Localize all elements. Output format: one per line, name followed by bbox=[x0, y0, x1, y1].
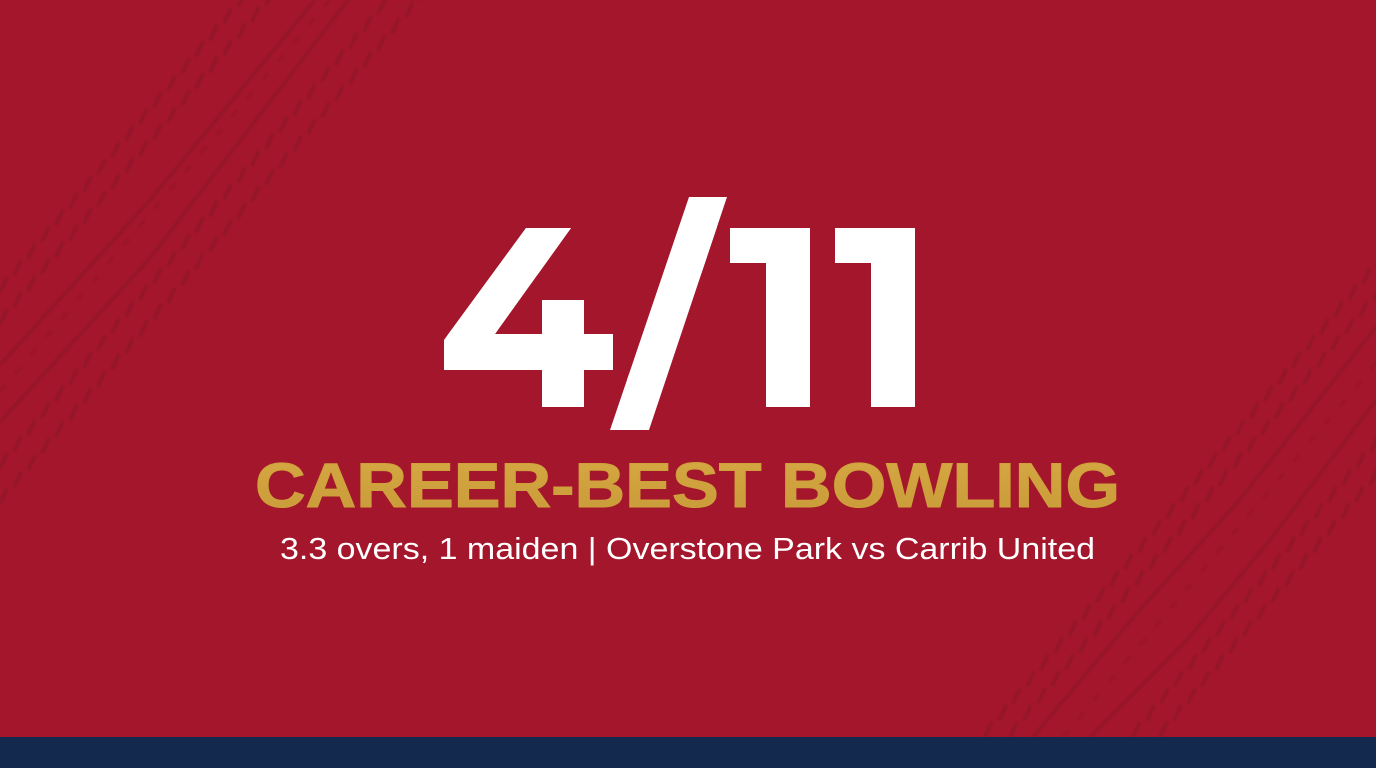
navy footer bar bbox=[0, 737, 1376, 768]
cricket ball seam: bottom right bbox=[985, 184, 1376, 737]
big score 4/11: 4/11 bbox=[440, 119, 975, 476]
heading: CAREER-BEST BOWLING bbox=[255, 451, 1120, 521]
match details subtitle: 3.3 overs, 1 maiden | Overstone Park vs Carrib United bbox=[280, 531, 1095, 566]
cricket ball seam: top left bbox=[0, 0, 455, 504]
